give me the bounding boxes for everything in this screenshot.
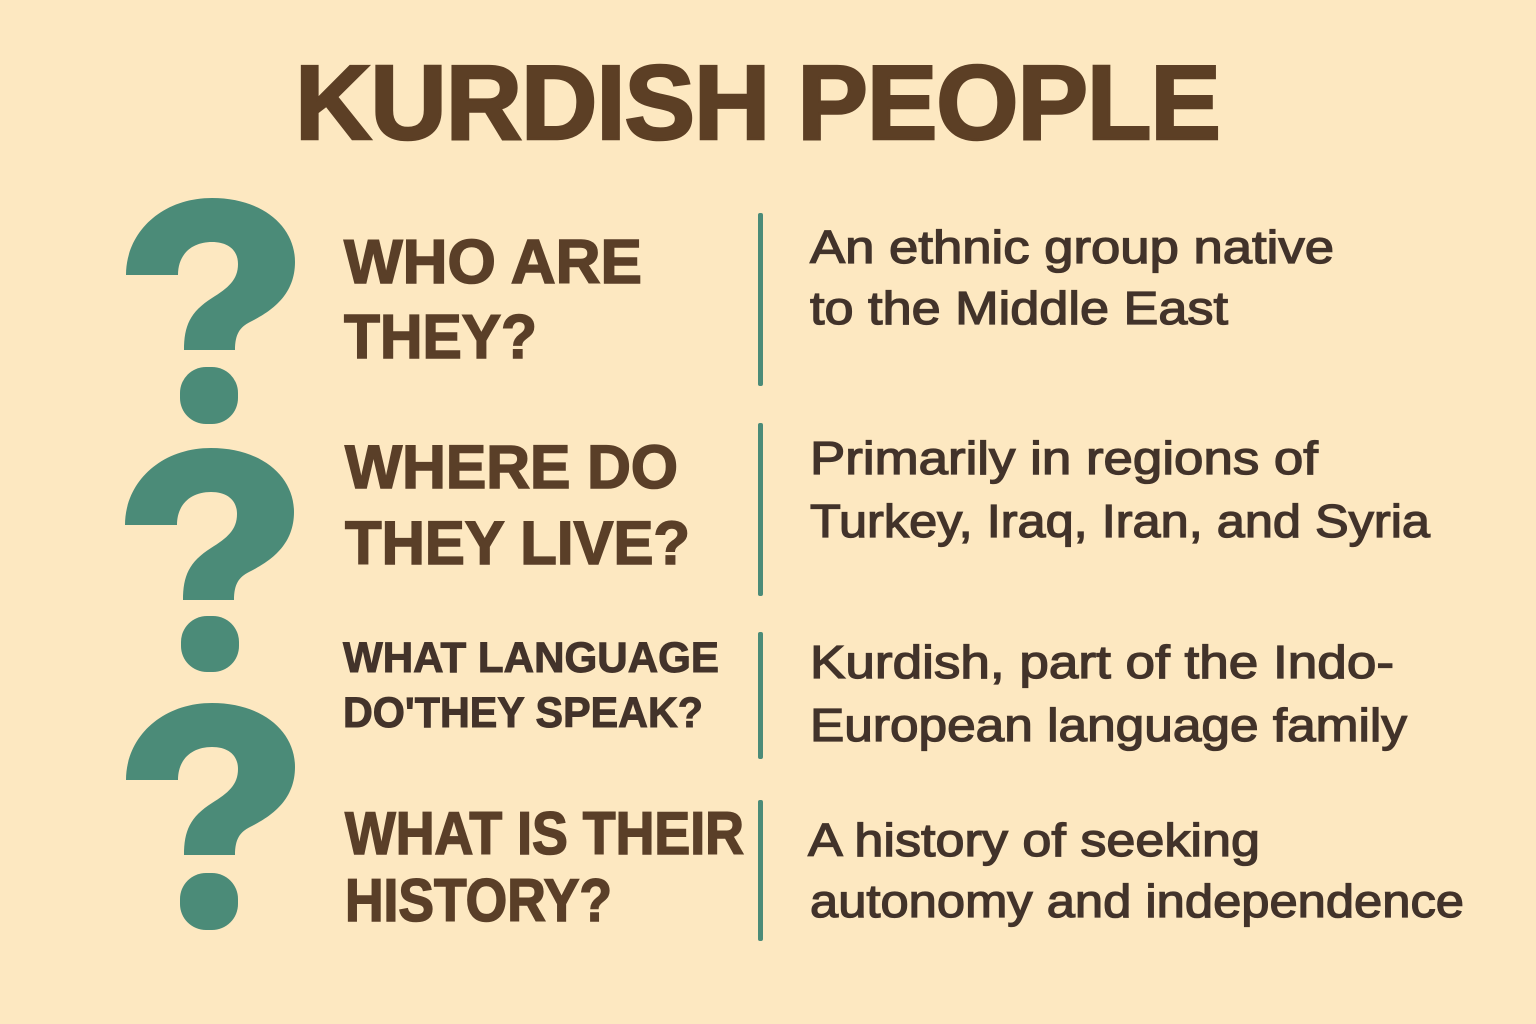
row: what is their history xyxy=(345,800,1464,941)
row: who are they xyxy=(344,213,1334,386)
answer: what language do they speak: European language family xyxy=(810,699,1407,751)
row: what language do they speak xyxy=(343,632,1407,759)
divider xyxy=(758,213,763,386)
divider xyxy=(758,423,763,596)
heading: what is their history xyxy=(345,800,744,934)
answer: what is their history xyxy=(808,814,1464,927)
icon: question mark 2 xyxy=(125,448,294,672)
title: KURDISH PEOPLE xyxy=(295,44,1221,162)
heading: where do they live: THEY LIVE? xyxy=(345,509,690,577)
answer: what language do they speak: Kurdish, part of the Indo- xyxy=(810,636,1394,688)
answer: what language do they speak xyxy=(810,636,1407,751)
heading: who are they: WHO ARE xyxy=(344,228,642,297)
answer: who are they: An ethnic group native xyxy=(810,221,1334,273)
heading: what language do they speak: WHAT LANGUAGE xyxy=(343,634,719,682)
answer: who are they xyxy=(810,221,1334,334)
answer: what is their history: autonomy and independence xyxy=(810,875,1464,927)
answer: where do they live: Primarily in regions of xyxy=(810,432,1318,484)
icon: question mark 3 xyxy=(126,703,295,930)
answer: where do they live: Turkey, Iraq, Iran, and Syria xyxy=(810,495,1430,547)
heading: what language do they speak xyxy=(343,634,719,737)
heading: what is their history: WHAT IS THEIR xyxy=(345,800,744,867)
row: where do they live xyxy=(345,423,1430,596)
divider xyxy=(758,632,763,759)
heading: who are they xyxy=(344,228,642,372)
heading: where do they live xyxy=(345,433,690,577)
answer: where do they live xyxy=(810,432,1430,547)
heading: what language do they speak: DO'THEY SPEAK? xyxy=(343,689,703,737)
heading: where do they live: WHERE DO xyxy=(345,433,678,501)
answer: who are they: to the Middle East xyxy=(810,282,1228,334)
heading: what is their history: HISTORY? xyxy=(345,867,612,934)
heading: who are they: THEY? xyxy=(344,303,537,372)
answer: what is their history: A history of seeking xyxy=(808,814,1260,866)
icon: question mark 1 xyxy=(126,198,295,424)
divider xyxy=(758,800,763,941)
